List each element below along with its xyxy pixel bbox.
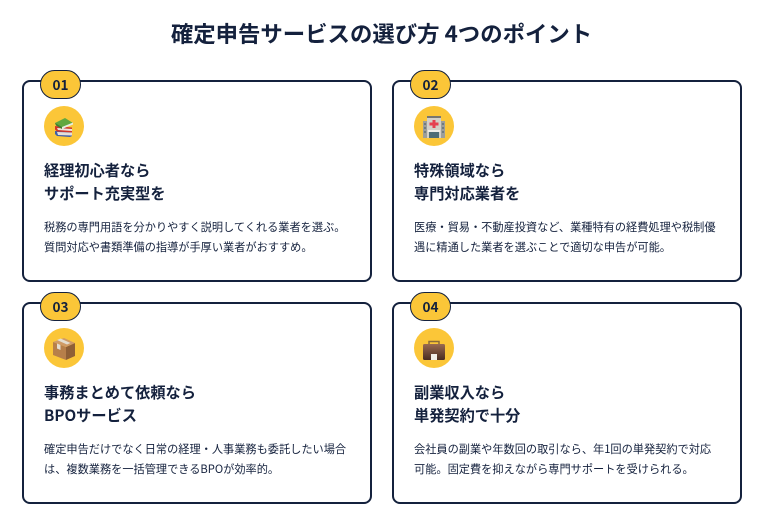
body text [414,441,711,477]
body text: 可能。固定費を抑えながら専門サポートを受けられる。 [414,461,694,477]
badge 04 [410,292,451,321]
badge 04: 04 [422,296,439,316]
panel: point 03 [22,302,372,504]
badge 02: 02 [422,74,439,94]
heading: 副業収入なら [414,381,505,403]
heading: 経理初心者なら [44,159,150,181]
body text: 確定申告だけでなく日常の経理・人事業務も委託したい場合 [44,441,346,457]
badge 01: 01 [52,74,69,94]
panel: point 02 [392,80,742,282]
heading [44,381,196,426]
heading: BPOサービス [44,404,137,426]
heading: 単発契約で十分 [414,404,520,426]
body text: 質問対応や書類準備の指導が手厚い業者がおすすめ。 [44,239,313,255]
body text: 会社員の副業や年数回の取引なら、年1回の単発契約で対応 [414,441,711,457]
body text: 医療・貿易・不動産投資など、業種特有の経費処理や税制優 [414,219,716,235]
title: 確定申告サービスの選び方 4つのポイント [171,17,592,49]
heading: 事務まとめて依頼なら [44,381,196,403]
badge 03 [40,292,81,321]
heading [44,159,166,204]
heading: 特殊領域なら [414,159,505,181]
panel: point 04 [392,302,742,504]
icon: books [44,106,84,146]
icon: package [44,328,84,368]
body text [44,441,346,477]
icon: hospital [414,106,454,146]
badge 03: 03 [52,296,69,316]
body text: 遇に精通した業者を選ぶことで適切な申告が可能。 [414,239,671,255]
heading [414,159,520,204]
heading: サポート充実型を [44,182,166,204]
panel: point 01 [22,80,372,282]
body text: は、複数業務を一括管理できるBPOが効率的。 [44,461,279,477]
badge 02 [410,70,451,99]
icon: briefcase [414,328,454,368]
badge 01 [40,70,81,99]
body text: 税務の専門用語を分かりやすく説明してくれる業者を選ぶ。 [44,219,345,235]
body text [44,219,345,255]
heading [414,381,520,426]
body text [414,219,716,255]
heading: 専門対応業者を [414,182,520,204]
